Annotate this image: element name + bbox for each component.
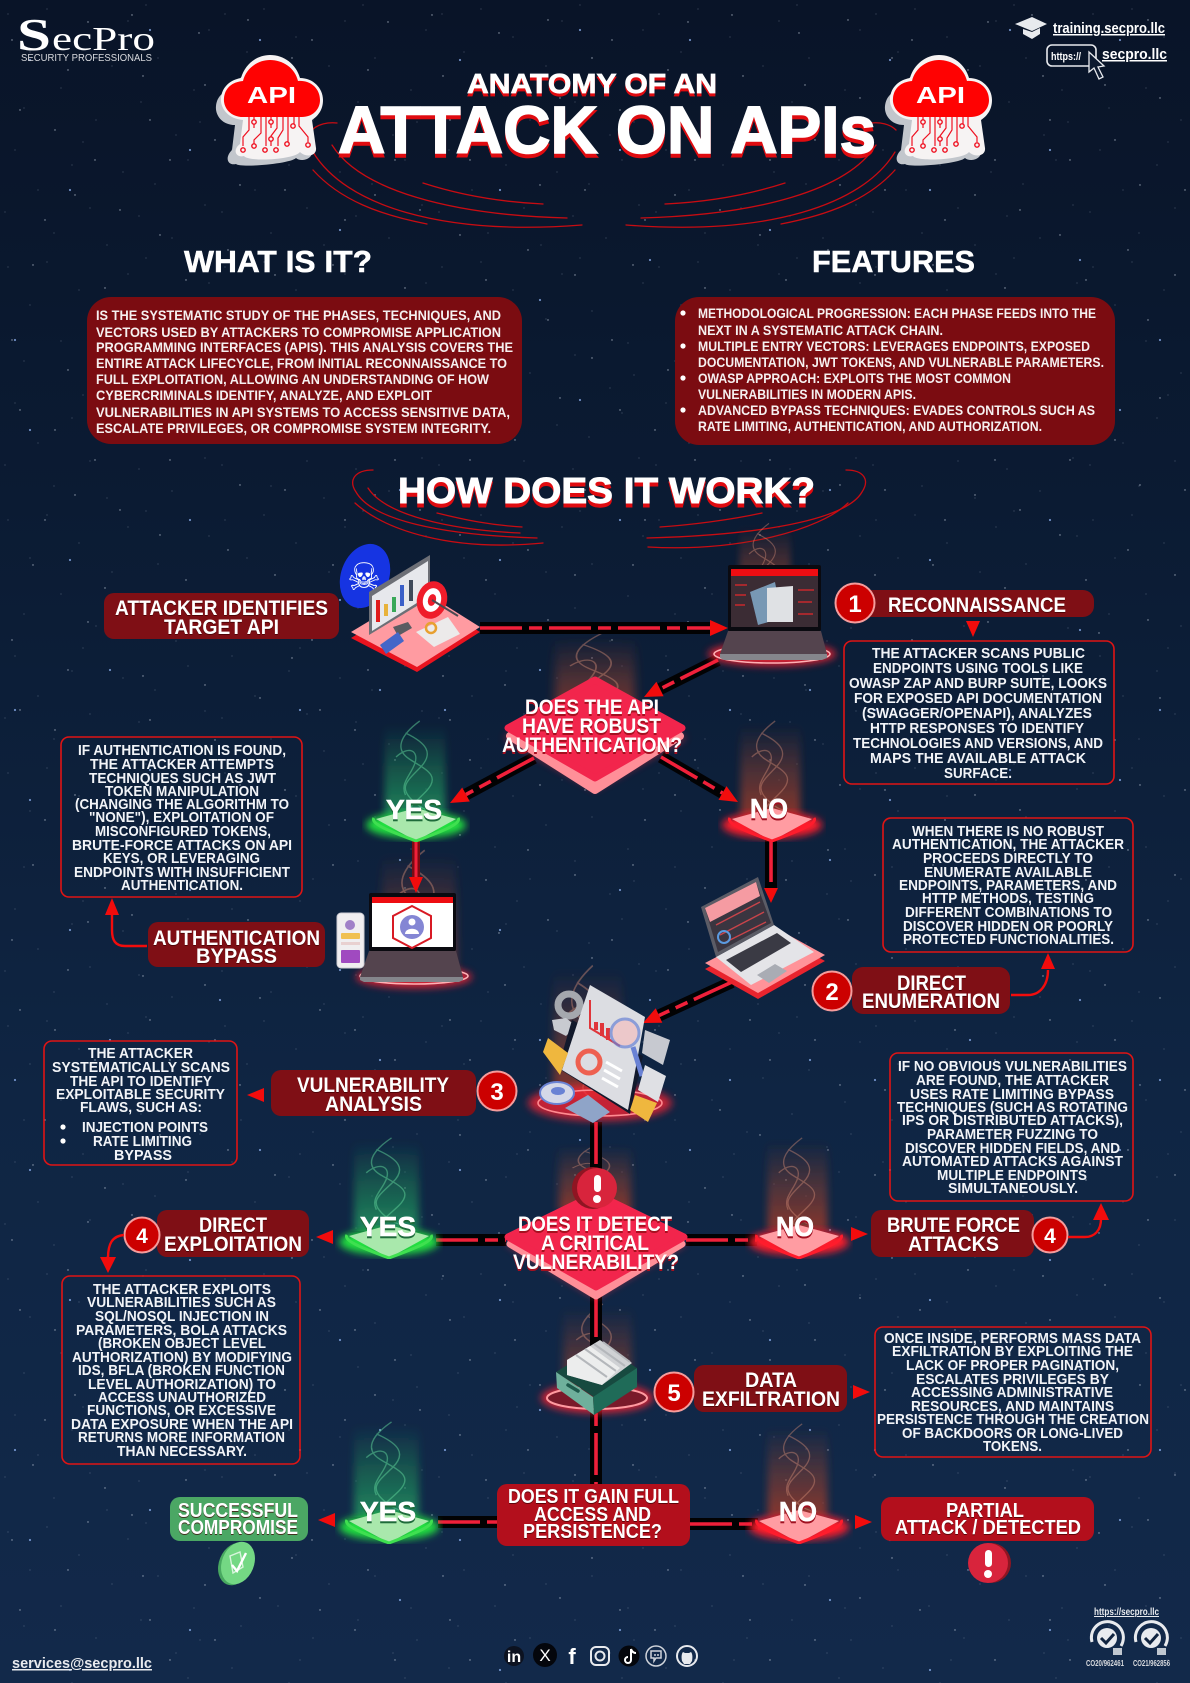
icon: API cloud right <box>885 55 992 166</box>
icon: https browser bar <box>1047 45 1096 66</box>
text box: brute force attacks: MULTIPLE ENDPOINTS <box>937 1167 1087 1184</box>
icon: direct enumeration isometric laptop <box>701 877 825 999</box>
decision label: yes, persistence <box>339 1496 439 1543</box>
panel: features <box>675 297 1115 445</box>
text box: direct exploitation: IDS, BFLA (BROKEN FUNCTION <box>78 1362 285 1379</box>
text box: direct enumeration: DISCOVER HIDDEN OR POORLY <box>903 918 1113 935</box>
pill: authentication bypass: AUTHENTICATION <box>153 927 320 950</box>
decision label: yes, persistence: YES <box>360 1496 416 1527</box>
text box: brute force attacks <box>890 1053 1133 1201</box>
text box: brute force attacks: IPS OR DISTRIBUTED ATTACKS), <box>902 1112 1123 1129</box>
arrow: question to no <box>661 757 738 802</box>
text box: authentication bypass: (CHANGING THE ALGORITHM TO <box>75 796 289 813</box>
arrow: exploitation badge to text <box>100 1235 124 1273</box>
text box: authentication bypass: AUTHENTICATION. <box>121 877 243 894</box>
pill: successful compromise: COMPROMISE <box>178 1517 298 1539</box>
badge: certificate 1: CO20/962461 <box>1086 1659 1124 1668</box>
panel: what is it: VULNERABILITIES IN API SYSTEMS TO ACCESS SENSITIVE DATA, <box>96 404 510 420</box>
logo: SecPro: ecPro <box>52 21 155 58</box>
text box: vulnerability analysis: RATE LIMITING <box>93 1133 192 1150</box>
title arcs <box>312 123 896 227</box>
panel: features: NEXT IN A SYSTEMATIC ATTACK CHAIN. <box>698 322 943 338</box>
text box: authentication bypass: TECHNIQUES SUCH AS JWT <box>89 770 276 787</box>
icon: x: X <box>539 1646 551 1665</box>
text box: data exfiltration: ACCESSING ADMINISTRATIVE <box>911 1384 1113 1401</box>
decision: full access and persistence: PERSISTENCE? <box>523 1521 662 1543</box>
decision: critical vulnerability: DOES IT DETECT <box>518 1213 672 1236</box>
pill: attacker identifies target API: TARGET API <box>164 616 279 639</box>
arrow: to brute force <box>851 1227 868 1241</box>
arrow: brute force badge to text <box>1068 1203 1109 1237</box>
arrow: enumeration pill to text box <box>1011 953 1055 995</box>
panel: features: DOCUMENTATION, JWT TOKENS, AND VULNERABLE PARAMETERS. <box>698 354 1104 370</box>
text box: data exfiltration: ESCALATES PRIVILEGES BY <box>916 1371 1109 1388</box>
icon: instagram <box>591 1647 609 1665</box>
pill: successful compromise: SUCCESSFUL <box>178 1500 298 1522</box>
panel: what is it: PROGRAMMING INTERFACES (APIS). THIS ANALYSIS COVERS THE <box>96 339 513 355</box>
text box: reconnaissance: OWASP ZAP AND BURP SUITE, LOOKS <box>849 675 1107 692</box>
pill: partial attack / detected <box>881 1497 1094 1541</box>
pill: partial attack / detected: PARTIAL <box>946 1500 1024 1522</box>
arrow: to partial attack <box>855 1515 872 1529</box>
icon: https browser bar: https:// <box>1051 51 1081 63</box>
text box: data exfiltration: LACK OF PROPER PAGINATION, <box>906 1357 1119 1374</box>
text box: direct exploitation: THAN NECESSARY. <box>117 1443 247 1460</box>
text box: direct exploitation: SQL/NOSQL INJECTION IN <box>95 1308 269 1325</box>
text box: direct exploitation: AUTHORIZATION) BY MODIFYING <box>72 1349 292 1366</box>
connectors: horizontal decision lines <box>436 1240 758 1524</box>
text box: direct enumeration: WHEN THERE IS NO ROBUST <box>912 823 1104 840</box>
text box: brute force attacks: DISCOVER HIDDEN FIELDS, AND <box>905 1140 1120 1157</box>
number badge 2 and pill: direct enumeration: 2 <box>825 979 839 1006</box>
text box: direct enumeration: PROTECTED FUNCTIONALITIES. <box>903 931 1114 948</box>
pill and badge 4: direct exploitation: 4 <box>136 1225 148 1248</box>
text box: authentication bypass <box>61 737 302 897</box>
text box: direct enumeration <box>883 818 1133 952</box>
text box: authentication bypass: THE ATTACKER ATTEMPTS <box>90 756 274 773</box>
certificates <box>1086 1607 1170 1668</box>
icon: linkedin: in <box>507 1649 521 1666</box>
decision label: no: NO <box>750 793 788 824</box>
icon: alert on partial attack <box>968 1543 1011 1583</box>
text box: authentication bypass: BRUTE-FORCE ATTACKS ON API <box>72 837 292 854</box>
heading: what is it: WHAT IS IT? <box>184 244 372 279</box>
icon: graduation cap <box>1015 17 1047 39</box>
decision: robust authentication: HAVE ROBUST <box>522 715 661 738</box>
text box: vulnerability analysis <box>44 1041 237 1165</box>
arrow: to vulnerability text <box>247 1088 264 1102</box>
text box: authentication bypass: IF AUTHENTICATION IS FOUND, <box>78 742 286 759</box>
text box: direct exploitation: RETURNS MORE INFORMATION <box>78 1429 285 1446</box>
panel: features: ADVANCED BYPASS TECHNIQUES: EVADES CONTROLS SUCH AS <box>698 402 1095 418</box>
panel: what is it: ESCALATE PRIVILEGES, OR COMPROMISE SYSTEM INTEGRITY. <box>96 420 491 436</box>
text box: reconnaissance: FOR EXPOSED API DOCUMENTATION <box>854 690 1102 707</box>
text box: direct enumeration: HTTP METHODS, TESTING <box>922 890 1094 907</box>
panel: what is it: IS THE SYSTEMATIC STUDY OF THE PHASES, TECHNIQUES, AND <box>96 307 501 323</box>
arrow: yes to authentication bypass <box>409 840 423 893</box>
text box: reconnaissance: ENDPOINTS USING TOOLS LIKE <box>873 660 1083 677</box>
text box: vulnerability analysis: EXPLOITABLE SECURITY <box>56 1086 225 1103</box>
link: website: secpro.llc <box>1102 46 1167 63</box>
decision label: no <box>722 793 822 841</box>
text box: data exfiltration: PERSISTENCE THROUGH THE CREATION <box>877 1411 1149 1428</box>
text box: direct enumeration: PROCEEDS DIRECTLY TO <box>923 850 1093 867</box>
text box: brute force attacks: USES RATE LIMITING BYPASS <box>910 1086 1114 1103</box>
text box: direct exploitation <box>62 1276 300 1464</box>
pill: authentication bypass: BYPASS <box>196 945 277 968</box>
pill and badge 4: brute force attacks: 4 <box>1044 1225 1056 1248</box>
pill and badge 4: brute force attacks: ATTACKS <box>908 1233 999 1256</box>
text box: reconnaissance: (SWAGGER/OPENAPI), ANALYZES <box>862 705 1092 722</box>
arrow: to direct exploitation <box>316 1230 333 1244</box>
pill: successful compromise <box>170 1497 308 1541</box>
link: training site: training.secpro.llc <box>1053 20 1165 37</box>
pill and badge 4: brute force attacks: BRUTE FORCE <box>887 1214 1020 1237</box>
icon: skull badge <box>331 537 399 615</box>
social icons <box>504 1643 697 1669</box>
panel: features: MULTIPLE ENTRY VECTORS: LEVERAGES ENDPOINTS, EXPOSED <box>698 338 1090 354</box>
decision label: yes, critical <box>339 1211 439 1258</box>
panel: features: METHODOLOGICAL PROGRESSION: EACH PHASE FEEDS INTO THE <box>698 305 1096 321</box>
icon: skull badge: ☠ <box>347 555 381 599</box>
panel: what is it: VECTORS USED BY ATTACKERS TO COMPROMISE APPLICATION <box>96 324 501 340</box>
decision label: no, critical <box>749 1211 849 1258</box>
pill: attacker identifies target API: ATTACKER IDENTIFIES <box>115 597 328 620</box>
text box: authentication bypass: MISCONFIGURED TOKENS, <box>95 823 271 840</box>
decision label: yes: YES <box>386 794 442 825</box>
decision label: yes <box>366 794 466 841</box>
decision: robust authentication: AUTHENTICATION? <box>502 734 682 757</box>
panel: features: VULNERABILITIES IN MODERN APIS. <box>698 386 916 402</box>
pill: attacker identifies target API <box>104 593 339 639</box>
text box: direct exploitation: LEVEL AUTHORIZATION) TO <box>88 1376 276 1393</box>
panel: what is it: CYBERCRIMINALS IDENTIFY, ANALYZE, AND EXPLOIT <box>96 387 432 403</box>
link: email: services@secpro.llc <box>12 1655 152 1672</box>
text box: direct exploitation: FUNCTIONS, OR EXCESSIVE <box>87 1402 276 1419</box>
arrow: no to direct enumeration <box>764 840 778 903</box>
text box: data exfiltration: RESOURCES, AND MAINTAINS <box>911 1398 1114 1415</box>
decision: full access and persistence: ACCESS AND <box>534 1504 651 1526</box>
arrow: question to yes <box>450 758 534 803</box>
text box: direct exploitation: (BROKEN OBJECT LEVEL <box>98 1335 266 1352</box>
text box: reconnaissance: MAPS THE AVAILABLE ATTACK <box>870 750 1086 767</box>
heading: how does it work: HOW DOES IT WORK? <box>398 470 815 511</box>
pill and badge 4: direct exploitation: DIRECT <box>199 1214 267 1237</box>
icon: success check <box>212 1537 261 1590</box>
icon: tiktok <box>618 1646 640 1666</box>
pill: authentication bypass <box>148 922 325 968</box>
arrow: to successful compromise <box>318 1513 335 1527</box>
logo: SecPro <box>17 9 155 64</box>
text box: data exfiltration: TOKENS. <box>983 1438 1042 1455</box>
text box: vulnerability analysis: THE API TO IDENTIFY <box>70 1073 212 1090</box>
text box: reconnaissance: SURFACE. <box>944 765 1012 782</box>
text box: vulnerability analysis: FLAWS, SUCH AS: <box>80 1099 202 1116</box>
icon: github <box>677 1646 697 1666</box>
icon: reconnaissance laptop <box>708 565 836 666</box>
text box: brute force attacks: ARE FOUND, THE ATTACKER <box>916 1072 1109 1089</box>
number badge 5 and pill: data exfiltration <box>654 1365 847 1412</box>
panel: features: OWASP APPROACH: EXPLOITS THE MOST COMMON <box>698 370 1011 386</box>
text box: direct enumeration: ENUMERATE AVAILABLE <box>924 864 1092 881</box>
text box: brute force attacks: SIMULTANEOUSLY. <box>948 1180 1078 1197</box>
pill and badge 4: direct exploitation <box>124 1210 309 1257</box>
decision label: no, critical: NO <box>776 1211 814 1242</box>
link: secpro site: https://secpro.llc <box>1094 1607 1159 1618</box>
text box: direct exploitation: VULNERABILITIES SUCH AS <box>87 1294 276 1311</box>
text box: reconnaissance <box>844 641 1114 784</box>
arrow: attacker to reconnaissance <box>480 620 728 636</box>
number badge 3 and pill: vulnerability analysis: VULNERABILITY <box>297 1074 449 1097</box>
top links: training and website <box>1015 17 1167 79</box>
number badge 2 and pill: direct enumeration: DIRECT <box>897 972 966 995</box>
text box: vulnerability analysis: BYPASS <box>114 1147 172 1164</box>
text box: authentication bypass: "NONE"), EXPLOITATION OF <box>89 809 274 826</box>
number badge 1 and pill: reconnaissance: 1 <box>848 591 862 618</box>
icon: data exfiltration file box <box>541 1340 653 1415</box>
text box: direct exploitation: PARAMETERS, BOLA ATTACKS <box>76 1322 287 1339</box>
arrow: enumeration to vulnerability analysis <box>643 982 732 1023</box>
panel: what is it: ENTIRE ATTACK LIFECYCLE, FROM INITIAL RECONNAISSANCE TO <box>96 355 507 371</box>
icon: x <box>533 1643 557 1667</box>
number badge 3 and pill: vulnerability analysis <box>271 1070 516 1116</box>
flames behind flow nodes <box>354 523 828 1517</box>
text box: data exfiltration: ONCE INSIDE, PERFORMS MASS DATA <box>884 1330 1141 1347</box>
text box: direct exploitation: ACCESS UNAUTHORIZED <box>98 1389 266 1406</box>
decision: robust authentication: DOES THE API <box>525 696 659 719</box>
text box: authentication bypass: KEYS, OR LEVERAGING <box>103 850 260 867</box>
decision label: yes, critical: YES <box>360 1211 416 1242</box>
arrow: down to reconnaissance text <box>966 621 980 637</box>
number badge 1 and pill: reconnaissance: RECONNAISSANCE <box>888 594 1066 617</box>
text box: vulnerability analysis: THE ATTACKER <box>88 1045 193 1062</box>
how it works arcs <box>353 470 865 548</box>
arrow: to data exfiltration text <box>853 1385 870 1399</box>
pill: partial attack / detected: ATTACK / DETECTED <box>895 1517 1081 1539</box>
text box: direct exploitation: DATA EXPOSURE WHEN THE API <box>71 1416 293 1433</box>
decision: full access and persistence: DOES IT GAIN FULL <box>508 1486 679 1508</box>
panel: features: RATE LIMITING, AUTHENTICATION, AND AUTHORIZATION. <box>698 418 1042 434</box>
number badge 5 and pill: data exfiltration: DATA <box>745 1369 797 1392</box>
text box: brute force attacks: AUTOMATED ATTACKS AGAINST <box>902 1153 1123 1170</box>
text box: data exfiltration <box>875 1327 1151 1457</box>
arrow: bypass pill to text box <box>105 898 147 946</box>
decision: critical vulnerability <box>506 1194 686 1298</box>
decision: robust authentication <box>502 680 686 790</box>
panel: what is it: FULL EXPLOITATION, ALLOWING AN UNDERSTANDING OF HOW <box>96 371 490 387</box>
number badge 2 and pill: direct enumeration: ENUMERATION <box>862 990 1000 1013</box>
icon: vulnerability analysis dashboard <box>528 985 672 1123</box>
number badge 1 and pill: reconnaissance <box>836 584 1094 622</box>
text box: direct exploitation: THE ATTACKER EXPLOITS <box>93 1281 271 1298</box>
icon: API cloud left <box>216 55 323 166</box>
decision: critical vulnerability: VULNERABILITY? <box>513 1251 679 1274</box>
decision: critical vulnerability: A CRITICAL <box>541 1232 649 1255</box>
icon: twitch <box>646 1646 666 1666</box>
logo: SecPro: SECURITY PROFESSIONALS <box>21 53 152 64</box>
connectors: central vertical spine <box>590 1122 602 1486</box>
number badge 5 and pill: data exfiltration: 5 <box>667 1380 681 1407</box>
text box: authentication bypass: TOKEN MANIPULATION <box>105 783 259 800</box>
decision label: no, persistence <box>749 1496 849 1543</box>
text box: brute force attacks: TECHNIQUES (SUCH AS ROTATING <box>897 1099 1128 1116</box>
icon: alert on critical vulnerability <box>572 1167 617 1209</box>
text box: brute force attacks: PARAMETER FUZZING TO <box>927 1126 1098 1143</box>
number badge 5 and pill: data exfiltration: EXFILTRATION <box>702 1388 840 1411</box>
icon: target monitor on platform with skull badge <box>331 537 480 672</box>
decision: full access and persistence <box>497 1484 690 1546</box>
text box: authentication bypass: ENDPOINTS WITH INSUFFICIENT <box>74 864 290 881</box>
text box: vulnerability analysis: SYSTEMATICALLY SCANS <box>52 1059 230 1076</box>
panel: what is it <box>87 297 522 444</box>
text box: reconnaissance: HTTP RESPONSES TO IDENTIFY <box>870 720 1084 737</box>
icon: authentication laptop and phone <box>337 893 472 988</box>
logo: SecPro: S <box>17 9 51 60</box>
title: ANATOMY OF AN <box>467 68 717 99</box>
number badge 3 and pill: vulnerability analysis: ANALYSIS <box>325 1093 422 1116</box>
pill and badge 4: brute force attacks <box>871 1210 1068 1257</box>
arrow: reconnaissance to authentication question <box>644 660 718 697</box>
heading: features: FEATURES <box>812 244 975 279</box>
text box: data exfiltration: EXFILTRATION BY EXPLOITING THE <box>892 1343 1133 1360</box>
icon: API cloud left: API <box>247 82 296 108</box>
pill and badge 4: direct exploitation: EXPLOITATION <box>164 1233 302 1256</box>
number badge 3 and pill: vulnerability analysis: 3 <box>490 1079 504 1106</box>
icon: linkedin <box>504 1646 524 1666</box>
text box: vulnerability analysis: INJECTION POINTS <box>82 1119 208 1136</box>
text box: data exfiltration: OF BACKDOORS OR LONG-LIVED <box>902 1425 1123 1442</box>
text box: direct enumeration: DIFFERENT COMBINATIONS TO <box>905 904 1112 921</box>
title: ATTACK ON APIs <box>338 93 876 168</box>
text box: reconnaissance: TECHNOLOGIES AND VERSIONS, AND <box>853 735 1103 752</box>
icon: cursor <box>1089 52 1104 79</box>
icon: API cloud right: API <box>916 82 965 108</box>
text box: direct enumeration: ENDPOINTS, PARAMETERS, AND <box>899 877 1117 894</box>
text box: brute force attacks: IF NO OBVIOUS VULNERABILITIES <box>898 1058 1127 1075</box>
text box: reconnaissance: THE ATTACKER SCANS PUBLIC <box>872 645 1085 662</box>
decision label: no, persistence: NO <box>779 1496 817 1527</box>
icon: facebook: f <box>568 1644 576 1669</box>
number badge 2 and pill: direct enumeration <box>812 967 1010 1014</box>
badge: certificate 2: CO21/962856 <box>1133 1659 1170 1668</box>
text box: direct enumeration: AUTHENTICATION, THE ATTACKER <box>892 836 1124 853</box>
